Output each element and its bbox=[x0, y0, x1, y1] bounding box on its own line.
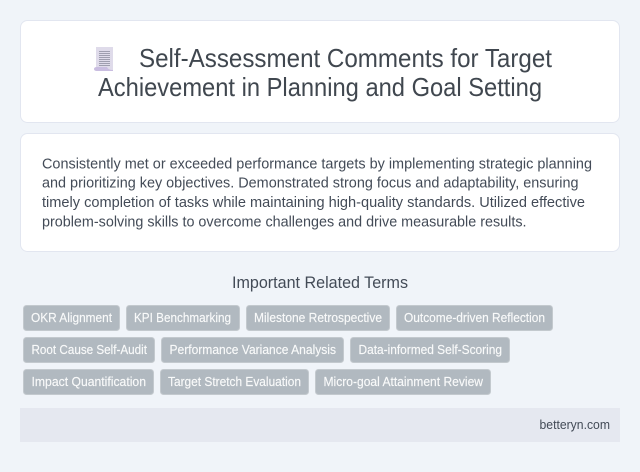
tag: Target Stretch Evaluation: Target Stretch Evaluation bbox=[168, 374, 301, 389]
tag: KPI Benchmarking bbox=[126, 306, 240, 330]
tag: Performance Variance Analysis bbox=[162, 338, 344, 362]
text block: summary: timely completion of tasks while maintaining high-quality standards. Utilized effective bbox=[42, 194, 585, 211]
tag: Data-informed Self-Scoring: Data-informed Self-Scoring bbox=[358, 342, 502, 357]
panel: title card bbox=[20, 20, 620, 122]
heading: title: Achievement in Planning and Goal Setting bbox=[98, 72, 542, 102]
tag: Data-informed Self-Scoring bbox=[350, 338, 510, 362]
tag list: related terms bbox=[24, 306, 552, 394]
tag: KPI Benchmarking: KPI Benchmarking bbox=[134, 310, 231, 325]
heading: related terms: Important Related Terms bbox=[232, 274, 408, 292]
tag: Root Cause Self-Audit bbox=[24, 338, 154, 362]
tag: Impact Quantification bbox=[24, 370, 154, 394]
tag: Outcome-driven Reflection bbox=[396, 306, 552, 330]
tag: Root Cause Self-Audit: Root Cause Self-Audit bbox=[32, 342, 147, 357]
tag: OKR Alignment: OKR Alignment bbox=[31, 310, 112, 325]
text block: summary bbox=[42, 155, 592, 230]
heading: title bbox=[98, 43, 553, 102]
heading: title: Self-Assessment Comments for Target bbox=[139, 43, 553, 73]
tag: Performance Variance Analysis: Performance Variance Analysis bbox=[170, 342, 336, 357]
text block: summary: Consistently met or exceeded performance targets by implementing strategic planning bbox=[42, 155, 592, 172]
tag: Impact Quantification: Impact Quantification bbox=[32, 374, 146, 389]
tag: Milestone Retrospective bbox=[246, 306, 390, 330]
tag: OKR Alignment bbox=[24, 306, 120, 330]
panel: summary card bbox=[20, 134, 620, 252]
icon: scroll document bbox=[94, 47, 113, 71]
tag: Micro-goal Attainment Review: Micro-goal Attainment Review bbox=[324, 374, 483, 389]
tag: Target Stretch Evaluation bbox=[160, 370, 308, 394]
tag: Outcome-driven Reflection: Outcome-driven Reflection bbox=[404, 310, 545, 325]
text block: summary: and prioritizing key objectives. Demonstrated strong focus and adaptability, ensuring bbox=[42, 175, 578, 192]
tag: Milestone Retrospective: Milestone Retrospective bbox=[254, 310, 382, 325]
tag: Micro-goal Attainment Review bbox=[316, 370, 490, 394]
text block: summary: problem-solving skills to overcome challenges and drive measurable results. bbox=[42, 214, 526, 230]
footer: site name: betteryn.com bbox=[540, 417, 610, 432]
footer bbox=[20, 408, 620, 442]
